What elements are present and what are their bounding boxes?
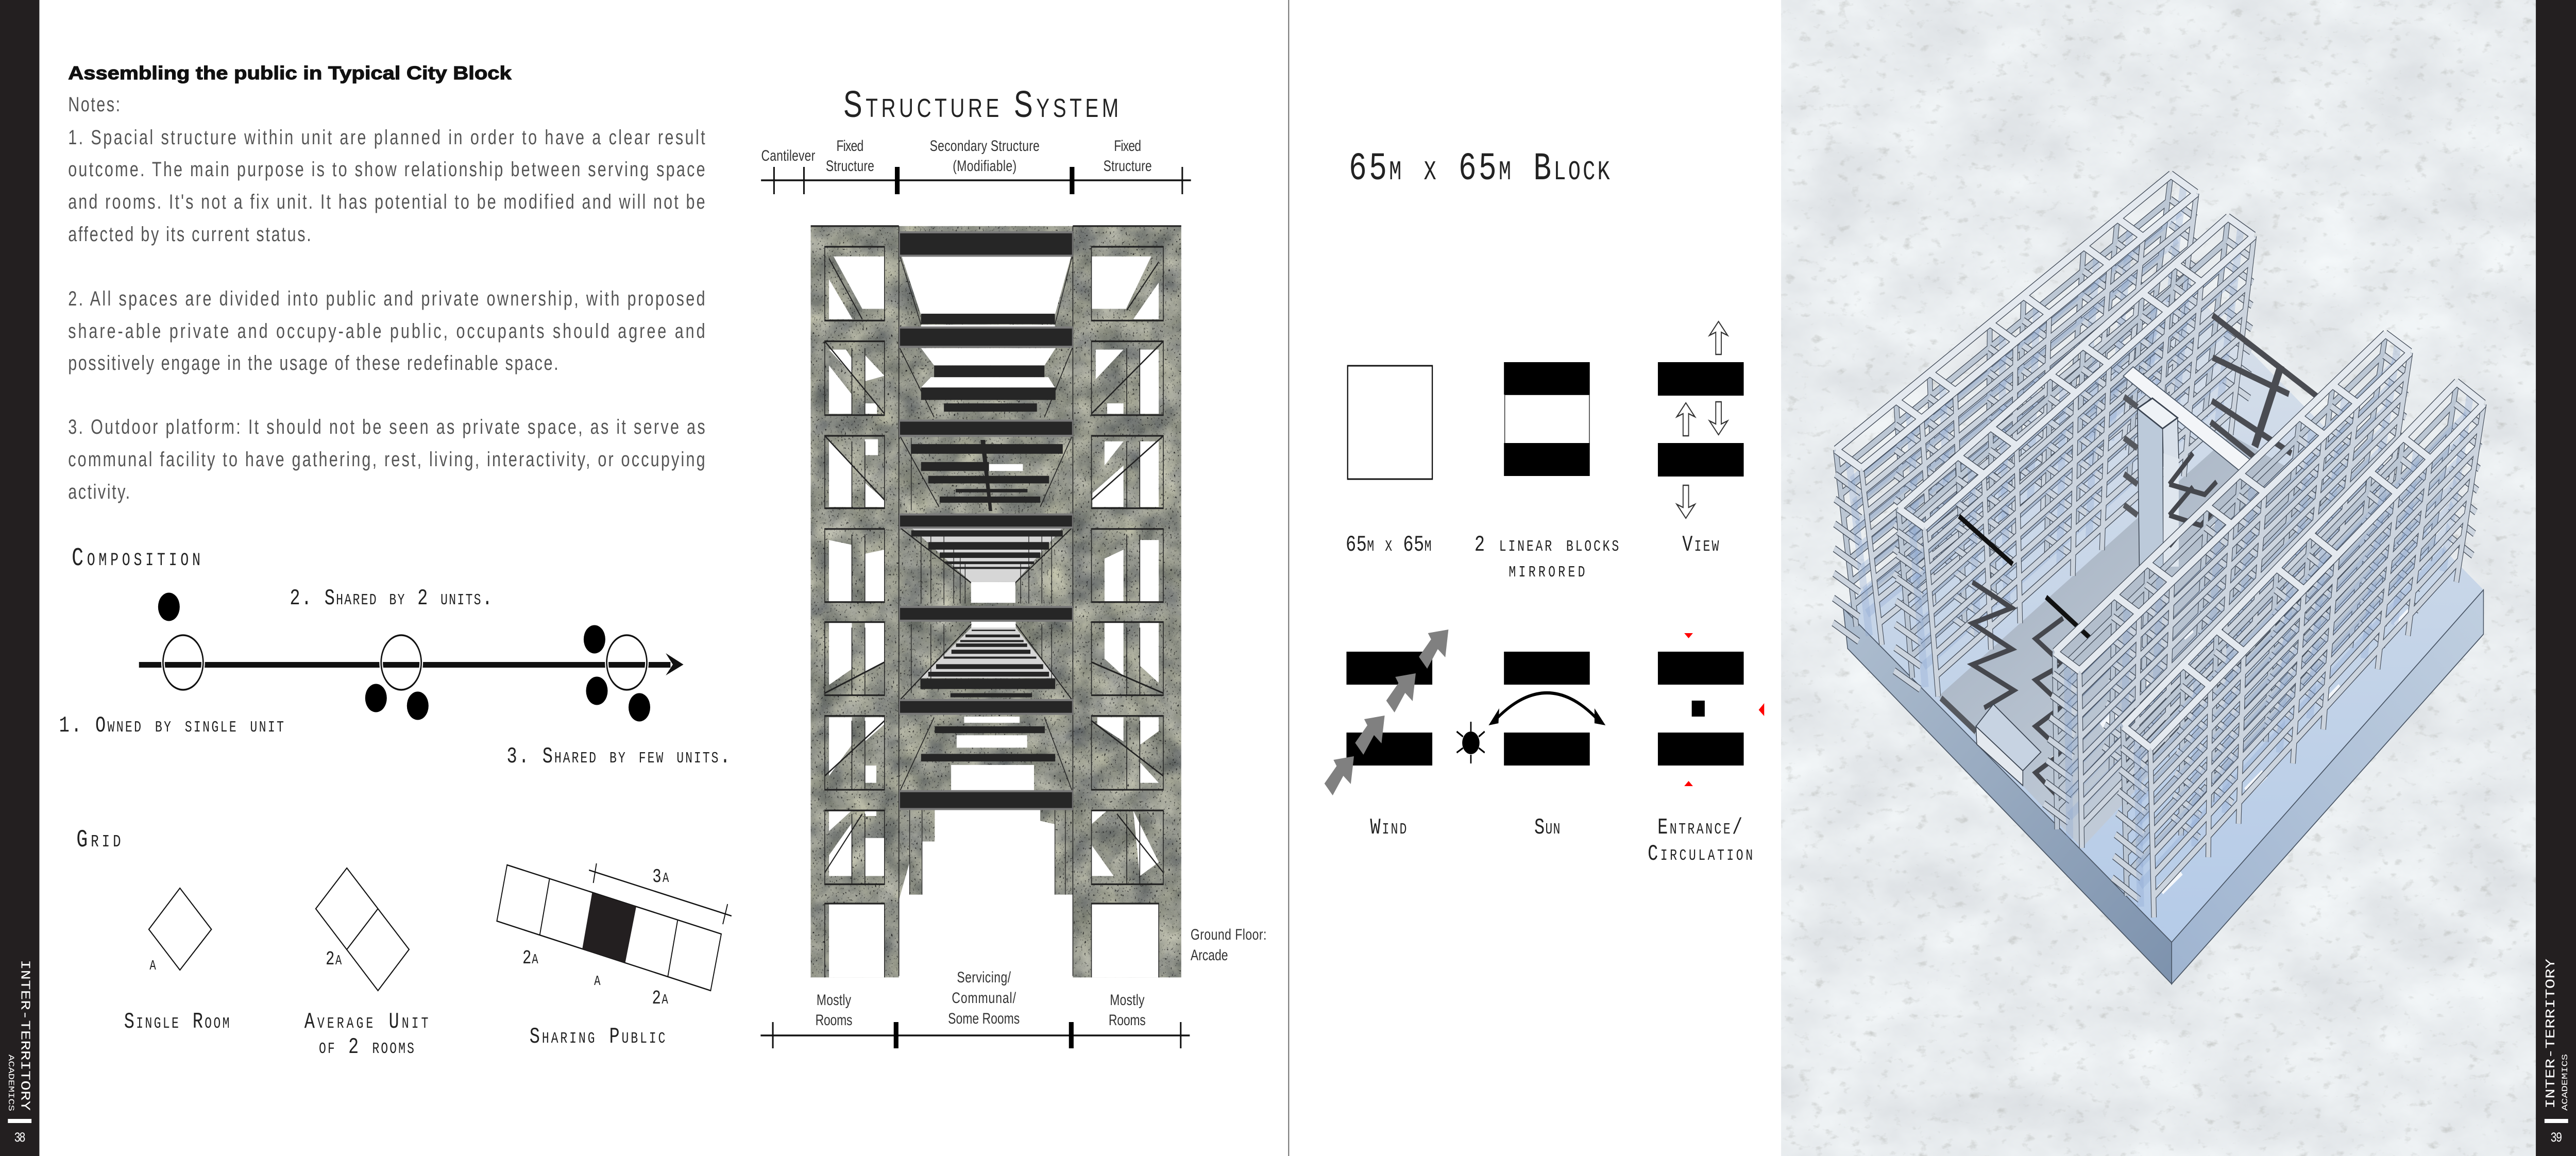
top dimension line — [761, 137, 1191, 194]
notes text block: affected by its current status. — [68, 223, 311, 246]
diagram: sun path — [1456, 652, 1605, 840]
perspective lines — [900, 256, 1072, 895]
grid: single room: a — [149, 954, 156, 976]
composition diagram — [139, 592, 684, 721]
grid: sharing public: 2a — [522, 948, 538, 970]
notes text block: and rooms. It's not a fix unit. It has potential to be modified and will not be — [68, 190, 705, 213]
diagram: entrance and circulation: Entrance/ — [1657, 814, 1742, 840]
grid: sharing public — [497, 863, 732, 1049]
diagram: entrance and circulation — [1648, 633, 1764, 866]
notes text block: 3. Outdoor platform: It should not be seen as private space, as it serve as — [68, 415, 705, 438]
diagram: site square — [1346, 366, 1432, 557]
bottom dimension line — [760, 968, 1190, 1048]
top dimension line: Cantilever — [761, 147, 815, 164]
isometric block model — [1833, 175, 2484, 984]
lower stairs and lobby — [1941, 516, 2090, 796]
bottom dimension line: Servicing/ — [957, 968, 1011, 986]
composition captions: 3. Shared by few units. — [506, 743, 731, 769]
heading: grid: Grid — [76, 826, 121, 854]
right sidebar: page 39: 39 — [2550, 1131, 2562, 1146]
bottom dimension line: Rooms — [816, 1011, 852, 1029]
diagram: entrance and circulation: Circulation — [1648, 841, 1753, 866]
right sidebar: page 39 — [2536, 0, 2576, 1156]
wall A — [1833, 175, 2196, 645]
grid: average unit: Average Unit — [304, 1009, 428, 1034]
plinth — [1843, 288, 2483, 984]
diagram: wind — [1325, 630, 1448, 840]
diagram: sun path: Sun — [1534, 814, 1560, 840]
composition captions — [59, 585, 731, 769]
notes text block: 1. Spacial structure within unit are planned in order to have a clear result — [68, 126, 705, 149]
top dimension line: Structure — [826, 157, 874, 175]
wall D — [2112, 382, 2484, 917]
top dimension line: (Modifiable) — [953, 157, 1016, 175]
diagram: site square: 65m x 65m — [1346, 532, 1432, 557]
left sidebar: page 38: INTER-TERRITORY — [17, 960, 32, 1111]
ground floor note: Ground Floor: — [1191, 926, 1266, 943]
top dimension line: Secondary Structure — [930, 137, 1040, 155]
grid: sharing public: 2a — [652, 988, 668, 1010]
notes text block: possitively engage in the usage of these redefinable space. — [68, 351, 558, 375]
notes text block: share-able private and occupy-able public, occupants should agree and — [68, 319, 705, 343]
bottom dimension line: Communal/ — [952, 989, 1016, 1007]
grid: sharing public: 3a — [652, 866, 669, 888]
structure elevation drawing — [811, 226, 1181, 977]
left sidebar: page 38 — [0, 0, 39, 1156]
diagram: view arrows: View — [1682, 532, 1719, 557]
top dimension line: Structure — [1104, 157, 1152, 175]
notes text block: 2. All spaces are divided into public and private ownership, with proposed — [68, 287, 705, 310]
diagram: two linear blocks: mirrored — [1509, 557, 1585, 583]
right sidebar: page 39: ACADEMICS — [2560, 1054, 2570, 1111]
frame outlines — [811, 226, 1181, 977]
diagram: two linear blocks — [1475, 362, 1619, 583]
grid: average unit — [304, 868, 428, 1060]
notes text block: outcome. The main purpose is to show relationship between serving space — [68, 158, 705, 181]
notes text block: Notes: — [68, 93, 120, 116]
right sidebar: page 39: INTER-TERRITORY — [2544, 959, 2559, 1109]
heading: composition: Composition — [72, 545, 200, 573]
heading: 65m x 65m block: 65m x 65m Block — [1349, 147, 1610, 192]
top dimension line: Fixed — [836, 137, 863, 155]
grid: single room: Single Room — [124, 1009, 230, 1034]
open bays in right bearing frame — [1092, 257, 1159, 977]
composition captions: 2. Shared by 2 units. — [290, 585, 493, 611]
diagram: view arrows — [1658, 321, 1744, 557]
concrete background panel — [1781, 0, 2536, 1156]
notes text block — [68, 93, 705, 503]
bottom dimension line: Mostly — [817, 991, 852, 1009]
left sidebar: page 38: 38 — [14, 1131, 26, 1146]
bottom dimension line: Some Rooms — [948, 1010, 1020, 1027]
diagram: wind: Wind — [1370, 814, 1406, 840]
grid: single room — [124, 888, 230, 1034]
ground floor note — [1191, 926, 1266, 964]
bottom dimension line: Mostly — [1110, 991, 1145, 1009]
notes text block: communal facility to have gathering, rest, living, interactivity, or occupying — [68, 448, 705, 471]
primary dark beams — [900, 232, 1073, 256]
diagram: two linear blocks: 2 linear blocks — [1475, 532, 1619, 557]
central openings — [902, 256, 1071, 791]
grid: sharing public: a — [594, 970, 601, 991]
grid: sharing public: Sharing Public — [530, 1024, 665, 1049]
open bays in left bearing frame — [829, 257, 885, 977]
secondary beams — [911, 314, 1063, 761]
bottom dimension line: Rooms — [1109, 1011, 1146, 1029]
grid: average unit: 2a — [326, 949, 342, 971]
rear bridges and stair — [2211, 315, 2317, 457]
grid: average unit: of 2 rooms — [319, 1034, 414, 1060]
wall B — [1894, 217, 2254, 696]
heading: structure system: Structure System — [843, 83, 1118, 125]
heading: assembling the public: Assembling the public in Typical City Block — [68, 62, 512, 83]
ground floor note: Arcade — [1191, 946, 1228, 964]
top dimension line: Fixed — [1114, 137, 1141, 155]
notes text block: activity. — [68, 480, 130, 503]
left sidebar: page 38: ACADEMICS — [6, 1055, 16, 1111]
central core and bridge — [2123, 367, 2252, 569]
wall C — [2044, 334, 2410, 848]
composition captions: 1. Owned by single unit — [59, 712, 284, 738]
